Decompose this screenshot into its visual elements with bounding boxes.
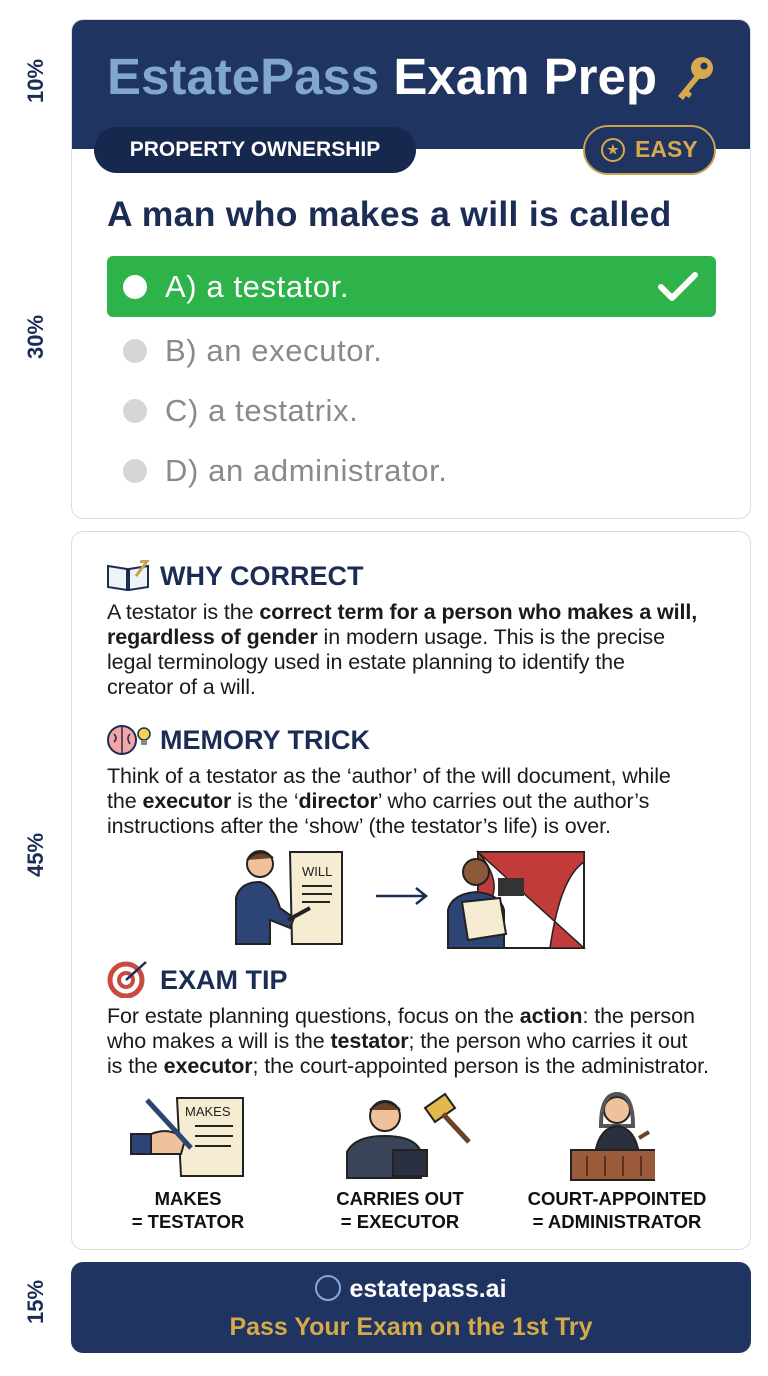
side label 15%: 15%	[23, 1280, 48, 1324]
footer	[71, 1262, 751, 1353]
text: memory trick: Think of a testator as the ‘author’ of the will document, while	[107, 764, 671, 788]
text: memory trick	[107, 764, 671, 838]
illustration: author to director	[235, 850, 586, 949]
option B: B) an executor.	[165, 333, 383, 368]
label: makes	[132, 1188, 244, 1232]
icon row: MAKES	[185, 1104, 231, 1119]
text: exam tip: who makes a will is the testator; the person who carries it out	[107, 1029, 687, 1053]
label: court-appointed: = ADMINISTRATOR	[533, 1211, 701, 1232]
text: why correct: A testator is the correct term for a person who makes a will,	[107, 600, 697, 624]
title: EstatePass Exam Prep	[107, 48, 657, 105]
text: exam tip: For estate planning questions, focus on the action: the person	[107, 1004, 695, 1028]
option D: D) an administrator.	[165, 453, 448, 488]
label: court-appointed: COURT-APPOINTED	[528, 1188, 706, 1209]
header band	[72, 20, 752, 149]
option A correct: A) a testator.	[165, 269, 349, 304]
text: why correct: creator of a will.	[107, 675, 256, 699]
label: makes: = TESTATOR	[132, 1211, 244, 1232]
difficulty pill	[583, 125, 716, 175]
heading: memory trick: MEMORY TRICK	[160, 725, 370, 755]
text: why correct	[107, 600, 697, 699]
heading: exam tip	[108, 961, 288, 998]
label: carries out: = EXECUTOR	[341, 1211, 459, 1232]
label: court-appointed	[528, 1188, 706, 1232]
text: memory trick: instructions after the ‘show’ (the testator’s life) is over.	[107, 814, 611, 838]
category pill: PROPERTY OWNERSHIP	[130, 138, 380, 161]
difficulty pill: ★	[607, 142, 619, 157]
panel: question card	[71, 19, 751, 519]
heading: exam tip: EXAM TIP	[160, 965, 288, 995]
text: exam tip	[107, 1004, 709, 1078]
text: why correct: legal terminology used in estate planning to identify the	[107, 650, 625, 674]
option A correct	[107, 256, 716, 317]
panel: explanation	[71, 531, 751, 1250]
tagline: Pass Your Exam on the 1st Try	[229, 1313, 593, 1341]
side label 45%: 45%	[23, 833, 48, 877]
option C: C) a testatrix.	[165, 393, 358, 428]
side label 10%: 10%	[23, 59, 48, 103]
text: memory trick: the executor is the ‘director’ who carries out the author’s	[107, 789, 649, 813]
text: why correct: regardless of gender in modern usage. This is the precise	[107, 625, 665, 649]
label: makes: MAKES	[155, 1188, 221, 1209]
heading: why correct: WHY CORRECT	[160, 561, 364, 591]
icon: key	[678, 57, 713, 100]
label: carries out: CARRIES OUT	[336, 1188, 464, 1209]
website: estatepass.ai	[349, 1275, 507, 1303]
label: carries out	[336, 1188, 464, 1232]
side label 30%: 30%	[23, 315, 48, 359]
difficulty pill: EASY	[635, 136, 698, 162]
question: A man who makes a will is called	[107, 194, 672, 234]
category pill	[94, 127, 416, 173]
text: exam tip: is the executor; the court-appointed person is the administrator.	[107, 1054, 709, 1078]
icon row	[130, 1092, 655, 1181]
illustration: author to director: WILL	[302, 864, 332, 879]
